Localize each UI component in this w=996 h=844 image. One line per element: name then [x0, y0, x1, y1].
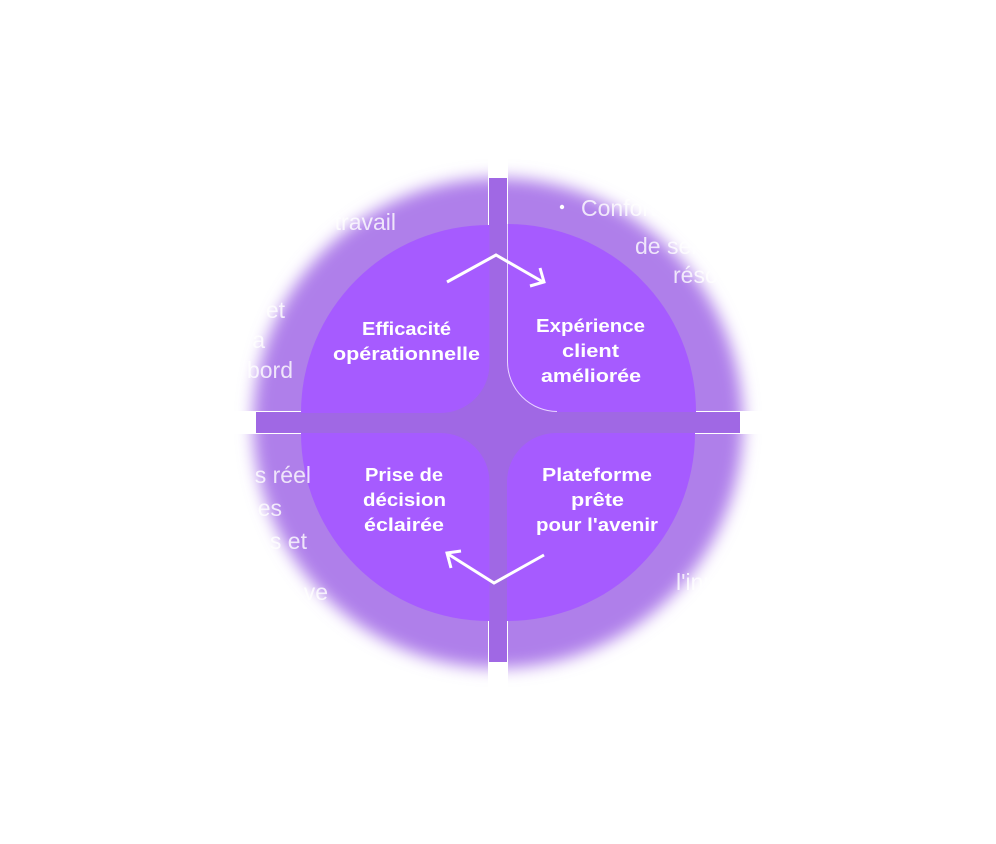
label: informed decision making: décision	[363, 489, 446, 510]
label: future-ready platform: Plateforme	[542, 464, 652, 485]
outer ring text: s et	[270, 528, 308, 554]
label: informed decision making	[363, 464, 446, 535]
quadrant: top left	[301, 225, 490, 413]
outer ring text: es	[258, 495, 282, 521]
outer ring text: l'innovation	[676, 569, 790, 595]
arrow: bottom	[447, 551, 544, 583]
cross bars	[256, 178, 740, 662]
outer ring text: de service	[635, 233, 740, 259]
label: improved customer experience: Expérience	[536, 315, 645, 336]
outer ring text: travail	[335, 209, 396, 235]
outer ring text: résolu	[673, 262, 736, 288]
outer ring text: ve	[304, 579, 328, 605]
outer ring text	[247, 195, 790, 605]
outer ring text: Confort	[581, 195, 657, 221]
quadrant: bottom left	[301, 433, 490, 621]
quadrant: top right	[507, 224, 696, 412]
label: informed decision making: éclairée	[364, 514, 444, 535]
label: informed decision making: Prise de	[365, 464, 443, 485]
outer ring text: et	[266, 297, 286, 323]
quadrant outline: top right inner edge	[508, 224, 557, 412]
label: future-ready platform: prête	[571, 489, 624, 510]
label: operational efficiency: Efficacité	[362, 318, 451, 339]
label: improved customer experience: client	[562, 340, 619, 361]
label: improved customer experience	[536, 315, 645, 386]
outer ring text: s réel	[255, 462, 311, 488]
arrow: top	[447, 255, 544, 286]
label: future-ready platform	[536, 464, 658, 535]
label: operational efficiency: opérationnelle	[333, 343, 480, 364]
outer ring text: a	[252, 327, 265, 353]
outer blurred ring	[253, 178, 743, 668]
label: improved customer experience: améliorée	[541, 365, 641, 386]
label: operational efficiency	[333, 318, 480, 364]
circular diagram	[242, 167, 754, 679]
quadrant: bottom right	[507, 433, 695, 621]
label: future-ready platform: pour l'avenir	[536, 514, 658, 535]
outer ring text: bord	[247, 357, 293, 383]
